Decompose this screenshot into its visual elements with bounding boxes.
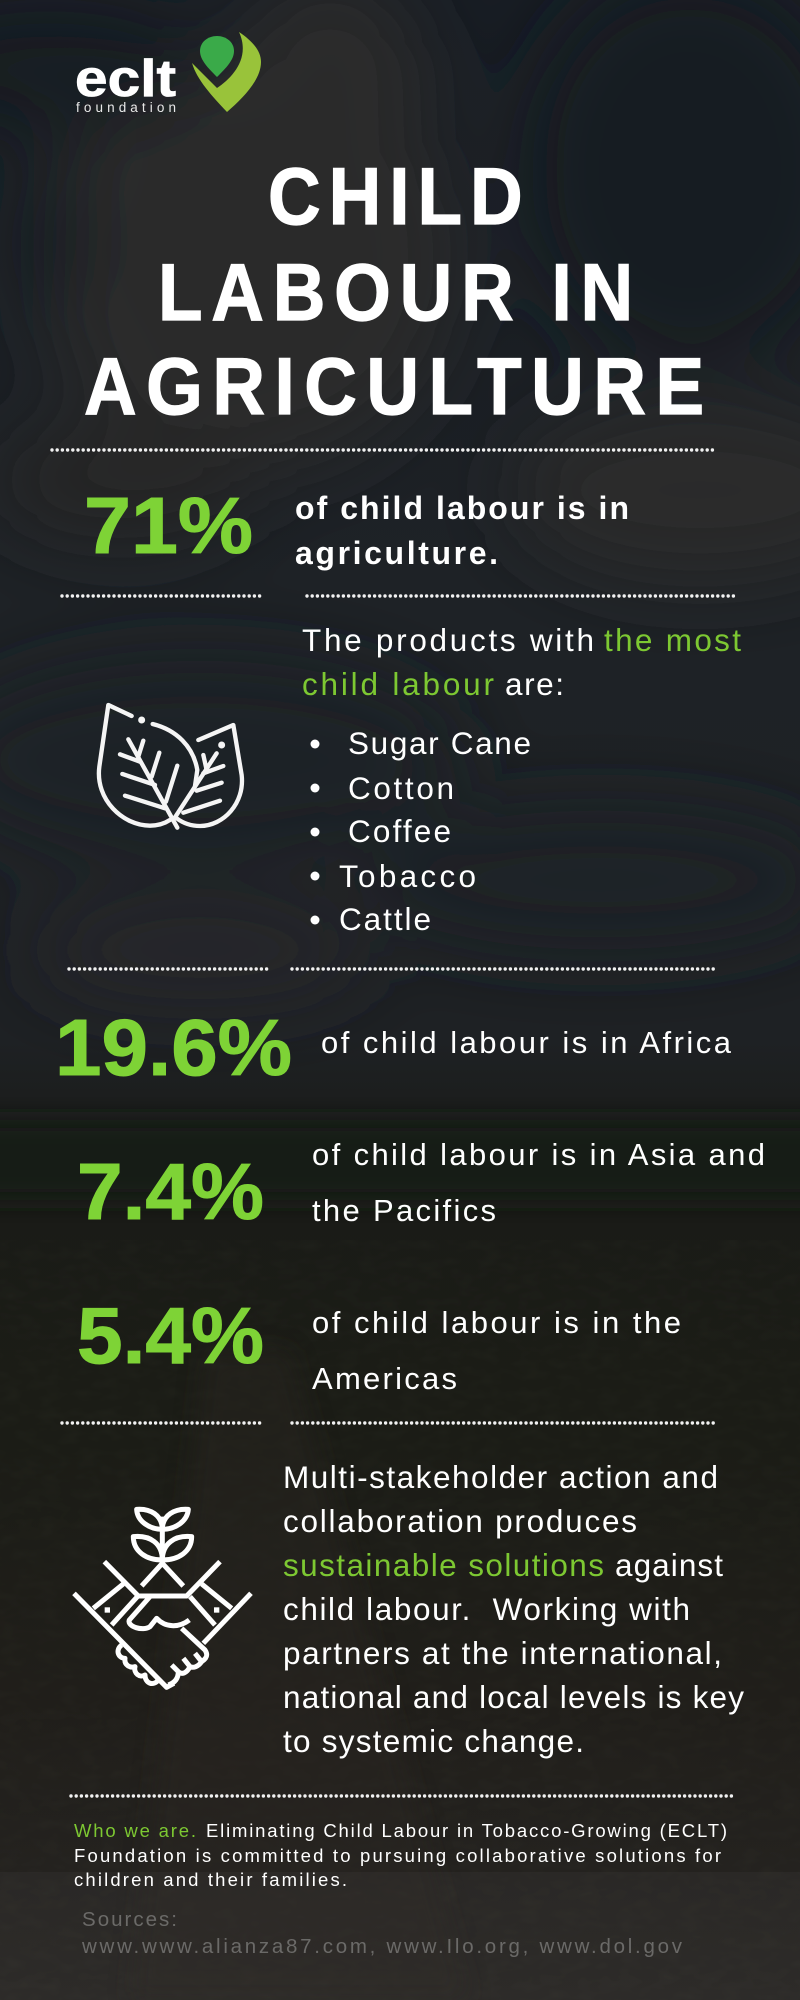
stat description: of child labour is in xyxy=(295,490,629,526)
logo: eclt foundation xyxy=(75,32,261,115)
stat description: Americas xyxy=(312,1361,457,1396)
stat: 5.4% Americas xyxy=(77,1291,681,1396)
stat description: the Pacifics xyxy=(312,1193,496,1228)
stat: 19.6% Africa xyxy=(55,1003,732,1092)
title xyxy=(84,151,704,432)
products list: Cattle xyxy=(339,901,431,937)
panel: multi-stakeholder action xyxy=(74,1459,744,1759)
title: CHILD xyxy=(268,151,523,242)
paragraph: against xyxy=(615,1547,723,1583)
logo wordmark: foundation xyxy=(76,100,176,115)
paragraph: partners at the international, xyxy=(283,1635,722,1671)
stat description xyxy=(295,490,629,571)
sources: www.www.alianza87.com, www.Ilo.org, www.dol.gov xyxy=(81,1935,683,1958)
paragraph: collaboration produces xyxy=(283,1503,637,1539)
title: LABOUR IN xyxy=(158,247,633,338)
paragraph: to systemic change. xyxy=(283,1723,584,1759)
icon: handshake with plant xyxy=(74,1509,251,1687)
products heading: The products with xyxy=(302,622,594,658)
products heading: the most xyxy=(604,622,741,658)
products list: Coffee xyxy=(348,813,451,849)
paragraph xyxy=(283,1459,744,1759)
products heading: child labour xyxy=(302,666,494,702)
paragraph: national and local levels is key xyxy=(283,1679,744,1715)
panel: products with the most child labour xyxy=(99,622,741,937)
stat number 19.6%: 19.6% xyxy=(55,1003,292,1092)
paragraph: sustainable solutions xyxy=(283,1547,604,1583)
icon: two leaves xyxy=(99,705,242,828)
products heading xyxy=(302,622,741,702)
products list xyxy=(310,725,531,937)
who we are: Foundation is committed to pursuing collaborative solutions for xyxy=(74,1845,721,1866)
stat description: agriculture. xyxy=(295,535,498,571)
products list: Sugar Cane xyxy=(348,725,531,761)
stat description xyxy=(312,1305,681,1396)
who we are xyxy=(74,1820,727,1890)
stat description: of child labour is in the xyxy=(312,1305,681,1340)
who we are: children and their families. xyxy=(74,1869,347,1890)
stat description xyxy=(312,1137,765,1228)
who we are: Who we are. xyxy=(74,1820,196,1841)
who we are: Eliminating Child Labour in Tobacco-Growing (ECLT) xyxy=(206,1820,727,1841)
stat number 7.4%: 7.4% xyxy=(77,1147,264,1236)
products list: Tobacco xyxy=(339,858,476,894)
sources: Sources: xyxy=(82,1908,177,1931)
stat: 71% in agriculture xyxy=(84,481,629,571)
products list: Cotton xyxy=(348,770,454,806)
paragraph: child labour. Working with xyxy=(283,1591,690,1627)
products heading: are: xyxy=(505,666,564,702)
stat description: of child labour is in Africa xyxy=(321,1025,732,1060)
stat number 71%: 71% xyxy=(84,481,253,570)
logo pin icon xyxy=(192,32,261,112)
stat number 5.4%: 5.4% xyxy=(77,1291,264,1380)
paragraph: Multi-stakeholder action and xyxy=(283,1459,718,1495)
logo wordmark: eclt xyxy=(75,50,176,108)
title: AGRICULTURE xyxy=(84,341,704,432)
stat description: of child labour is in Asia and xyxy=(312,1137,765,1172)
sources xyxy=(81,1908,683,1958)
stat: 7.4% Asia and the Pacifics xyxy=(77,1137,765,1236)
